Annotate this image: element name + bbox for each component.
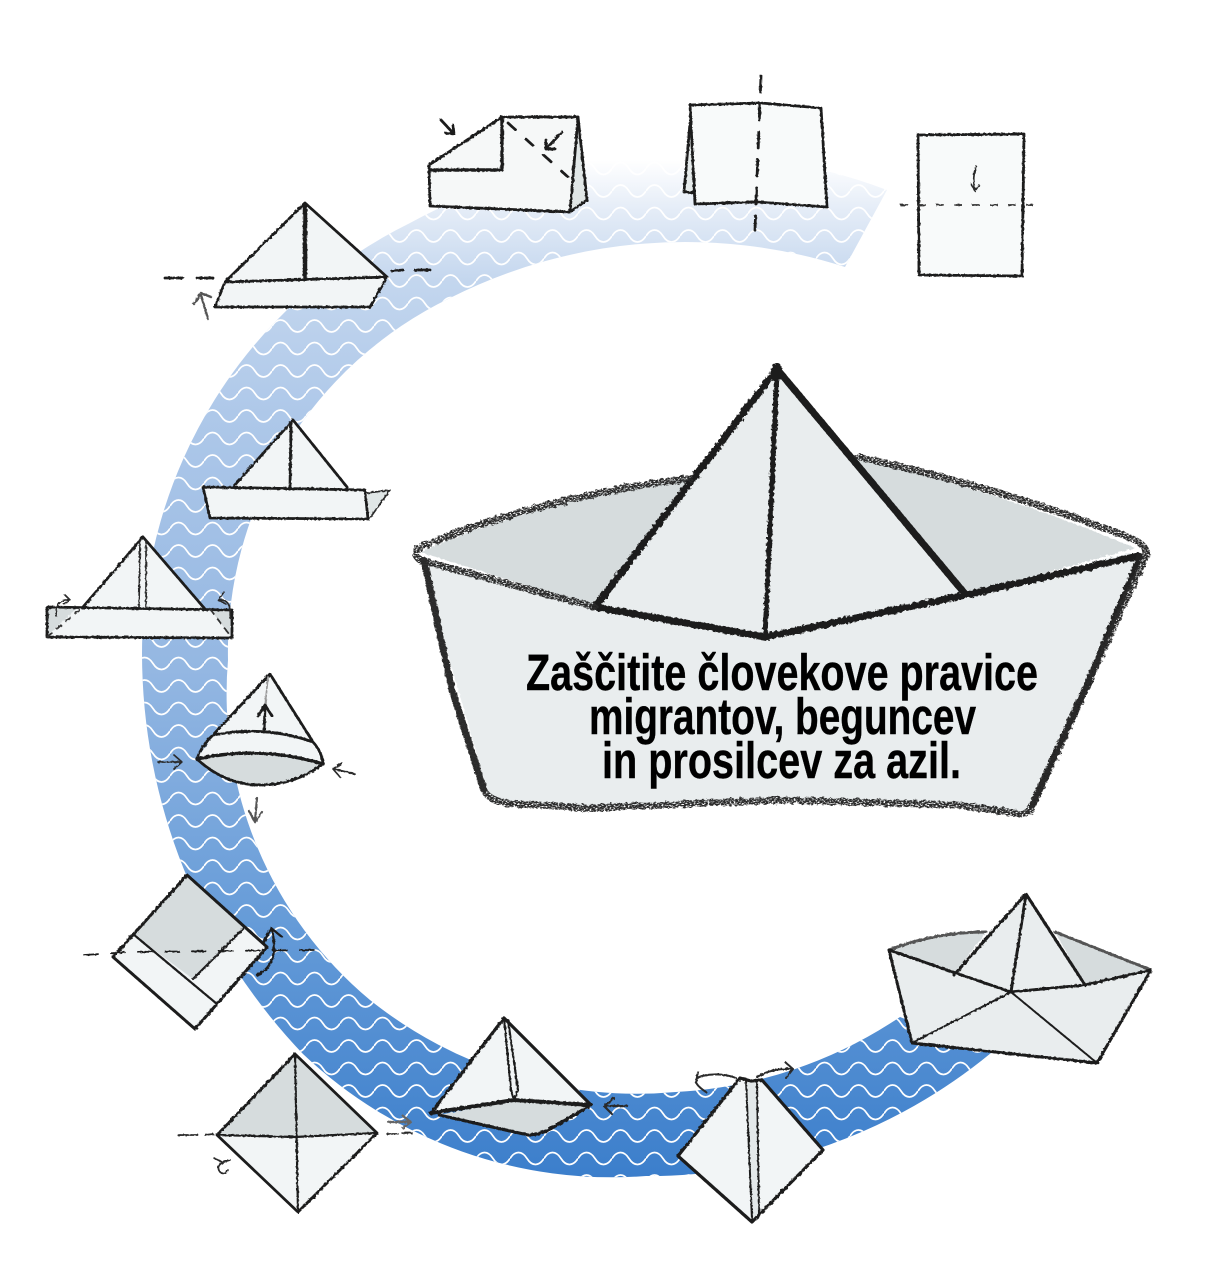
step 10: pyramid hat with opened base: [431, 1018, 627, 1135]
step 8: rotated square with band: [84, 875, 314, 1029]
step 12: finished small paper boat: [889, 894, 1151, 1063]
main paper boat with message: [416, 367, 1147, 814]
step 4: triangle hat with folded band: [165, 203, 430, 319]
message text: [526, 644, 1038, 789]
boat pencil outline: [416, 457, 1147, 814]
message text: Zaščitite človekove pravice: [526, 644, 1038, 701]
message text: migrantov, beguncev: [589, 688, 976, 745]
step 7: rounded hat opening: [158, 674, 355, 822]
step 3: corner folded down: [429, 117, 587, 212]
boat drawing: [420, 367, 1146, 814]
step 11: tall diamond being pulled apart: [678, 1062, 823, 1222]
step 2: paper folded in half with vertical fold: [684, 76, 827, 230]
step 1: sheet of paper with horizontal fold: [900, 134, 1033, 276]
step 5: hat with band and side flap: [203, 420, 390, 519]
message text: in prosilcev za azil.: [602, 732, 961, 789]
step 9: square diamond with cross folds: [178, 1054, 412, 1212]
water ring band: [142, 153, 991, 1177]
step 6: hat with corner folds: [47, 537, 232, 638]
